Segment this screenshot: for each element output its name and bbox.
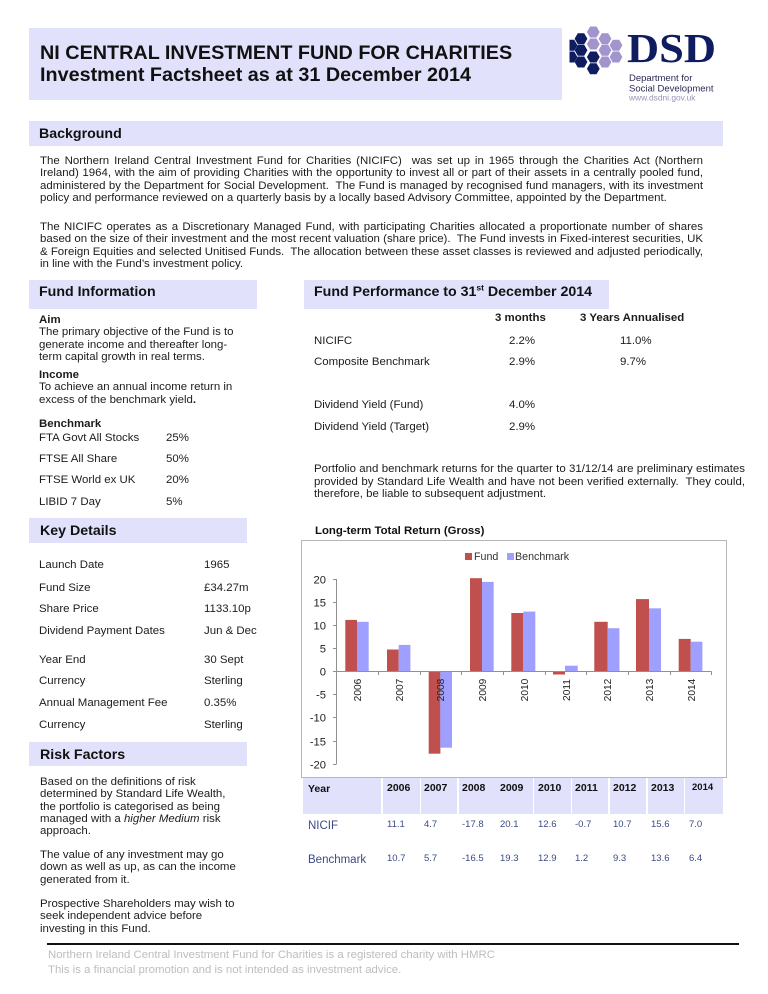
performance table: 11.0% (620, 335, 652, 347)
background paragraph 2: & Foreign Equities and selected Unitised Funds. The allocation between these asset classes is reviewed and adjusted periodically, (40, 246, 703, 258)
x-axis year labels: 2007 (395, 678, 406, 701)
returns table: 2011 (575, 782, 598, 794)
returns table: 2014 (692, 782, 713, 793)
key details list: £34.27m (204, 582, 249, 594)
performance table (314, 312, 684, 433)
performance table: 3 months (495, 312, 546, 324)
returns table: 2006 (387, 782, 410, 794)
returns table: 2009 (500, 782, 523, 794)
y-axis labels: 20 (314, 574, 326, 586)
performance note (314, 463, 745, 500)
performance table: 2.9% (509, 356, 535, 368)
returns table: 12.6 (538, 819, 556, 830)
returns table: 11.1 (387, 819, 405, 830)
background heading bar (29, 121, 723, 146)
income text: Income To achieve an annual income return in excess of the benchmark yield. (39, 369, 232, 406)
background heading bar: Background (39, 126, 122, 142)
risk factors heading bar: Risk Factors (40, 747, 125, 763)
panel: background (29, 121, 723, 270)
background paragraph 2 (40, 221, 703, 270)
benchmark bars (357, 582, 702, 748)
fund performance heading bar (304, 280, 609, 309)
key details list (39, 559, 257, 731)
chart frame (302, 540, 726, 778)
background paragraph 2: The NICIFC operates as a Discretionary Managed Fund, with participating Charities allocated a proportionate number of shares (40, 221, 703, 233)
performance note: Portfolio and benchmark returns for the quarter to 31/12/14 are preliminary estimates (314, 463, 745, 475)
legend: Fund (474, 551, 498, 563)
benchmark allocation: Benchmark (39, 418, 101, 430)
y-axis labels: 15 (314, 598, 326, 610)
panel: key details (29, 518, 257, 731)
returns table: 9.3 (613, 853, 626, 864)
key details list: Jun & Dec (204, 625, 257, 637)
performance table: Composite Benchmark (314, 356, 430, 368)
x-axis year labels: 2013 (645, 678, 656, 701)
footer charity note: Northern Ireland Central Investment Fund for Charities is a registered charity with HMRC (48, 949, 495, 961)
x-axis year labels (353, 678, 698, 701)
returns table (303, 778, 723, 866)
background paragraph 2: based on the size of their investment and the most recent valuation (share price). The Fund invests in Fixed-interest securities, UK (40, 233, 703, 245)
performance note: provided by Standard Life Wealth and have not been verified externally. They could, (314, 476, 745, 488)
fund information heading bar (29, 280, 257, 309)
returns table: 2010 (538, 782, 561, 794)
performance table: 2.9% (509, 421, 535, 433)
y-axis labels: 10 (314, 620, 326, 632)
risk advice text: Prospective Shareholders may wish to seek independent advice before investing in this Fund. (40, 898, 235, 935)
returns table: 5.7 (424, 853, 437, 864)
performance table: 2.2% (509, 335, 535, 347)
returns table: -17.8 (462, 819, 484, 830)
benchmark allocation (39, 418, 189, 508)
x-axis year labels: 2011 (562, 679, 573, 701)
benchmark allocation: FTSE All Share (39, 453, 117, 465)
performance note: therefore, be liable to subsequent adjustment. (314, 488, 546, 500)
panel: fund performance (304, 280, 745, 500)
footer promotion note: This is a financial promotion and is not intended as investment advice. (48, 964, 401, 976)
key details list: Launch Date (39, 559, 104, 571)
title banner (29, 28, 562, 100)
returns table: 19.3 (500, 853, 518, 864)
risk value text: The value of any investment may go down as well as up, as can the income generated from it. (40, 849, 236, 886)
returns table: 2013 (651, 782, 674, 794)
fund information heading bar: Fund Information (39, 284, 156, 300)
y-axis labels: -5 (316, 690, 326, 702)
x-axis year labels: 2006 (353, 678, 364, 701)
risk definition text: Based on the definitions of risk determined by Standard Life Wealth, the portfolio is categorised as being managed with a higher Medium risk approach. (40, 776, 225, 837)
returns table: -16.5 (462, 853, 484, 864)
performance table: 4.0% (509, 399, 535, 411)
subtitle: Investment Factsheet as at 31 December 2014 (40, 64, 471, 86)
key details list: Sterling (204, 719, 243, 731)
risk factors heading bar (29, 742, 247, 766)
key details list: Sterling (204, 675, 243, 687)
benchmark allocation: LIBID 7 Day (39, 496, 101, 508)
benchmark allocation: FTSE World ex UK (39, 474, 135, 486)
key details list: Currency (39, 719, 85, 731)
key details heading bar (29, 518, 247, 543)
legend: Benchmark (515, 551, 570, 563)
benchmark allocation: 25% (166, 432, 189, 444)
background paragraph 1: The Northern Ireland Central Investment Fund for Charities (NICIFC) was set up in 1965 through the Charities Act (Northern (40, 155, 703, 167)
returns table: 4.7 (424, 819, 437, 830)
returns table: Year (308, 783, 330, 795)
icon: DSD logo: Department for (629, 73, 692, 84)
key details list: Share Price (39, 603, 99, 615)
y-axis labels (310, 574, 326, 772)
performance table: Dividend Yield (Fund) (314, 399, 423, 411)
key details list: Currency (39, 675, 85, 687)
returns table: 10.7 (613, 819, 632, 830)
returns table: 2007 (424, 782, 447, 794)
fund bars (345, 578, 691, 754)
y-axis labels: -10 (310, 712, 326, 724)
performance table: 3 Years Annualised (580, 312, 684, 324)
x-axis year labels: 2012 (603, 678, 614, 701)
key details list: 30 Sept (204, 654, 243, 666)
y-axis labels: -15 (310, 736, 326, 748)
returns table: 12.9 (538, 853, 556, 864)
benchmark allocation: 5% (166, 496, 183, 508)
returns table: -0.7 (575, 819, 591, 830)
key details list: 1965 (204, 559, 229, 571)
icon: DSD logo: Social Development (629, 84, 714, 94)
key details list: 1133.10p (204, 603, 251, 615)
chart title: Long-term Total Return (Gross) (315, 525, 484, 537)
x-axis year labels: 2014 (687, 678, 698, 701)
key details list: Fund Size (39, 582, 90, 594)
background paragraph 1: Ireland) 1964, with the aim of providing Charities with the opportunity to invest all or part of their assets in a centrally pooled fund, (40, 167, 703, 179)
footer (47, 943, 739, 977)
key details list: Annual Management Fee (39, 697, 167, 709)
performance table: Dividend Yield (Target) (314, 421, 429, 433)
background paragraph 2: in line with the Fund’s investment policy. (40, 258, 243, 270)
key details list: 0.35% (204, 697, 236, 709)
aim text: Aim The primary objective of the Fund is to generate income and thereafter long- term capital growth in real terms. (39, 314, 234, 363)
x-axis year labels: 2009 (478, 678, 489, 701)
icon: DSD logo: DSD (627, 25, 716, 71)
y-axis labels: -20 (310, 760, 326, 772)
returns table: 13.6 (651, 853, 670, 864)
legend (465, 551, 570, 563)
performance table: 9.7% (620, 356, 646, 368)
x-axis year labels: 2010 (520, 678, 531, 701)
x-axis year labels: 2008 (436, 678, 447, 701)
returns table: 2008 (462, 782, 485, 794)
background paragraph 1: administered by the Department for Social Development. The Fund is managed by recognised fund managers, with its investment (40, 180, 703, 192)
returns table: NICIF (308, 820, 338, 832)
benchmark allocation: FTA Govt All Stocks (39, 432, 139, 444)
performance table: NICIFC (314, 335, 352, 347)
key details list: Dividend Payment Dates (39, 625, 165, 637)
returns table: 1.2 (575, 853, 588, 864)
returns table: 15.6 (651, 819, 670, 830)
fund performance heading bar: Fund Performance to 31st December 2014 (314, 282, 592, 300)
returns table: 7.0 (689, 819, 702, 830)
panel: fund information (29, 280, 257, 508)
panel: risk factors (29, 742, 247, 935)
y-axis labels: 5 (320, 644, 326, 656)
table header cells (303, 778, 381, 814)
background paragraph 1: policy and performance reviewed on a quarterly basis by a locally based Advisory Committee, appointed by the Department. (40, 192, 667, 204)
title heading: NI CENTRAL INVESTMENT FUND FOR CHARITIES (40, 42, 512, 64)
icon: DSD logo: www.dsdni.gov.uk (628, 92, 696, 102)
axes (333, 579, 712, 764)
benchmark allocation: 50% (166, 453, 189, 465)
benchmark allocation: 20% (166, 474, 189, 486)
y-axis labels: 0 (320, 666, 326, 678)
key details heading bar: Key Details (40, 523, 116, 539)
icon: DSD logo (570, 25, 716, 102)
returns table: 6.4 (689, 853, 702, 864)
key details list: Year End (39, 654, 86, 666)
background paragraph 1 (40, 155, 703, 204)
returns table: 2012 (613, 782, 636, 794)
returns table: 20.1 (500, 819, 518, 830)
returns table: Benchmark (308, 854, 366, 866)
returns table: 10.7 (387, 853, 406, 864)
